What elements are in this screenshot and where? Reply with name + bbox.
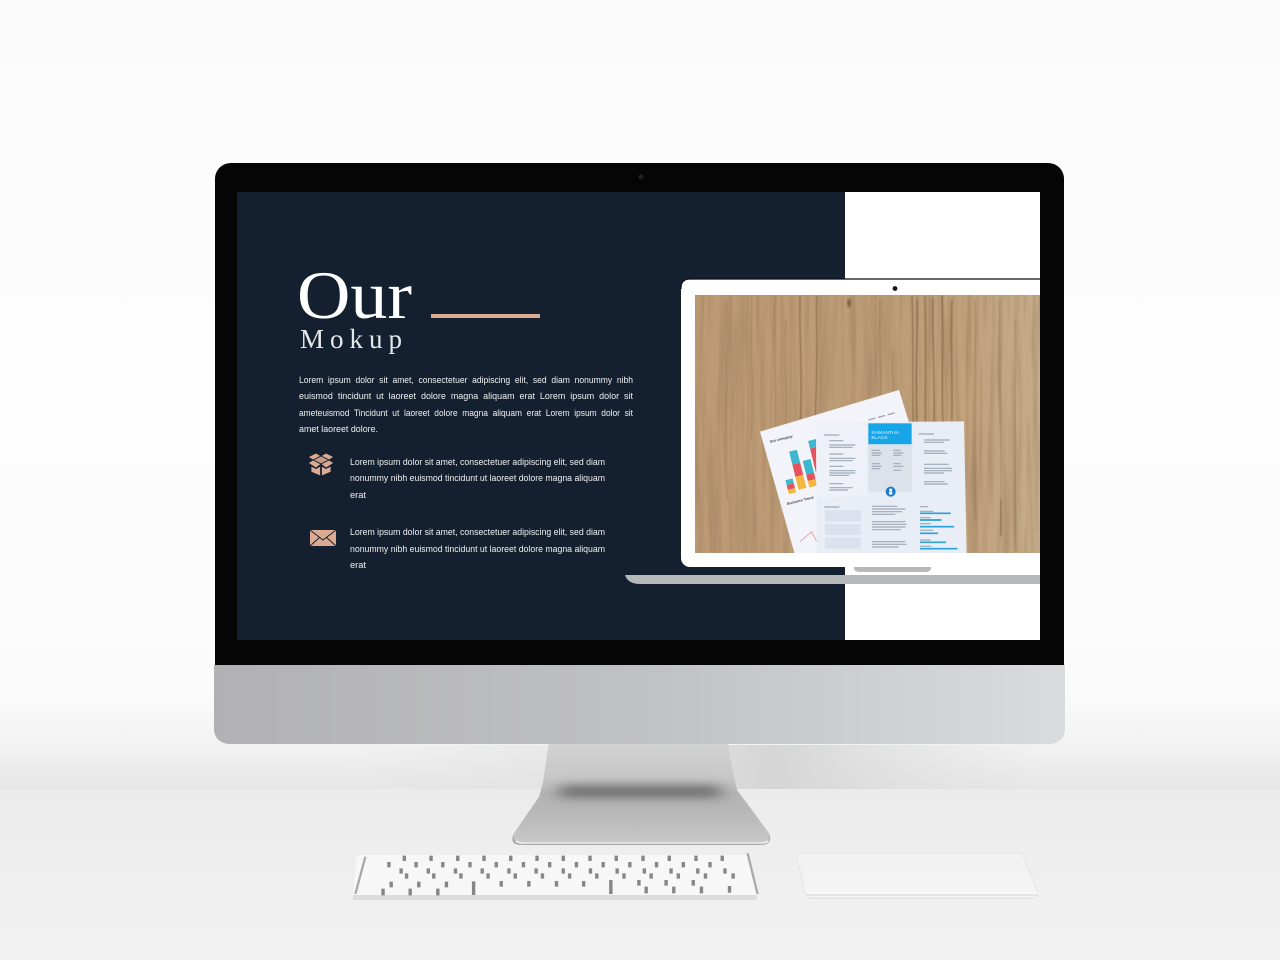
front resume sheet bbox=[816, 421, 967, 555]
laptop base bbox=[625, 575, 1040, 584]
back sheet with bar chart: Business Trend bbox=[787, 495, 814, 506]
document stack bbox=[760, 390, 967, 555]
intro paragraph: euismod tincidunt ut laoreet dolore magna aliquam erat Lorem ipsum dolor sit bbox=[299, 391, 633, 402]
monitor bbox=[214, 163, 1101, 744]
resume sheet highlight bbox=[816, 440, 817, 473]
bullet text: first bbox=[350, 457, 605, 501]
keyboard key gaps bbox=[355, 853, 758, 895]
monitor chin bbox=[214, 665, 1065, 744]
wood photo bbox=[695, 295, 1040, 555]
bullet text: second: nonummy nibh euismod tincidunt ut laoreet dolore magna aliquam bbox=[350, 544, 605, 555]
wood dark grain lines bbox=[726, 296, 1016, 550]
camera bbox=[638, 174, 644, 180]
icon: box bbox=[308, 453, 334, 476]
resume skill bars bbox=[920, 513, 957, 549]
laptop camera bbox=[893, 286, 897, 291]
monitor stand bbox=[510, 744, 775, 845]
screen: navy slide bbox=[237, 192, 845, 640]
bullet text: first: Lorem ipsum dolor sit amet, consectetuer adipiscing elit, sed diam bbox=[350, 457, 605, 468]
laptop top outline bbox=[681, 279, 1040, 289]
intro paragraph: ameteuismod Tincidunt ut laoreet dolore magna aliquam erat Lorem ipsum dolor sit bbox=[299, 408, 633, 419]
laptop mockup bbox=[625, 278, 1040, 584]
bullet text: second bbox=[350, 527, 605, 571]
screen: white panel bbox=[845, 192, 1040, 640]
resume header bbox=[868, 423, 912, 444]
intro paragraph: amet laoreet dolore. bbox=[299, 424, 378, 435]
background: desk bbox=[0, 789, 1280, 960]
trackpad bbox=[797, 853, 1038, 898]
title accent line bbox=[431, 314, 540, 318]
title: Our: Our bbox=[297, 257, 412, 333]
bullet text: second: erat bbox=[350, 560, 366, 571]
resume text placeholder lines bbox=[824, 434, 952, 547]
subtitle: Mokup: Mokup bbox=[300, 324, 402, 354]
back sheet with bar chart: Our company bbox=[769, 434, 794, 444]
wood knot bbox=[847, 298, 851, 308]
intro paragraph: Lorem ipsum dolor sit amet, consectetuer adipiscing elit, sed diam nonummy nibh bbox=[299, 375, 633, 386]
monitor bezel bbox=[215, 163, 1064, 665]
bullet text: first: erat bbox=[350, 490, 366, 501]
resume header: SAMANTHA bbox=[871, 430, 900, 436]
bullet text: second: Lorem ipsum dolor sit amet, consectetuer adipiscing elit, sed diam bbox=[350, 527, 605, 538]
resume header: BLACK bbox=[871, 435, 888, 441]
keyboard bbox=[353, 853, 758, 900]
resume profile badge bbox=[886, 487, 896, 497]
keyboard edge bbox=[353, 895, 757, 900]
laptop hinge notch bbox=[854, 567, 931, 572]
resume education blocks bbox=[825, 510, 861, 549]
bullet text: first: nonummy nibh euismod tincidunt ut laoreet dolore magna aliquam bbox=[350, 473, 605, 484]
laptop screen frame bbox=[681, 280, 845, 567]
icon: envelope bbox=[310, 530, 336, 546]
back sheet with bar chart bbox=[760, 390, 909, 553]
intro paragraph bbox=[299, 375, 633, 435]
keyboard body bbox=[353, 855, 757, 900]
resume contact panel bbox=[868, 444, 912, 492]
wall shadow behind stand bbox=[340, 745, 1040, 789]
